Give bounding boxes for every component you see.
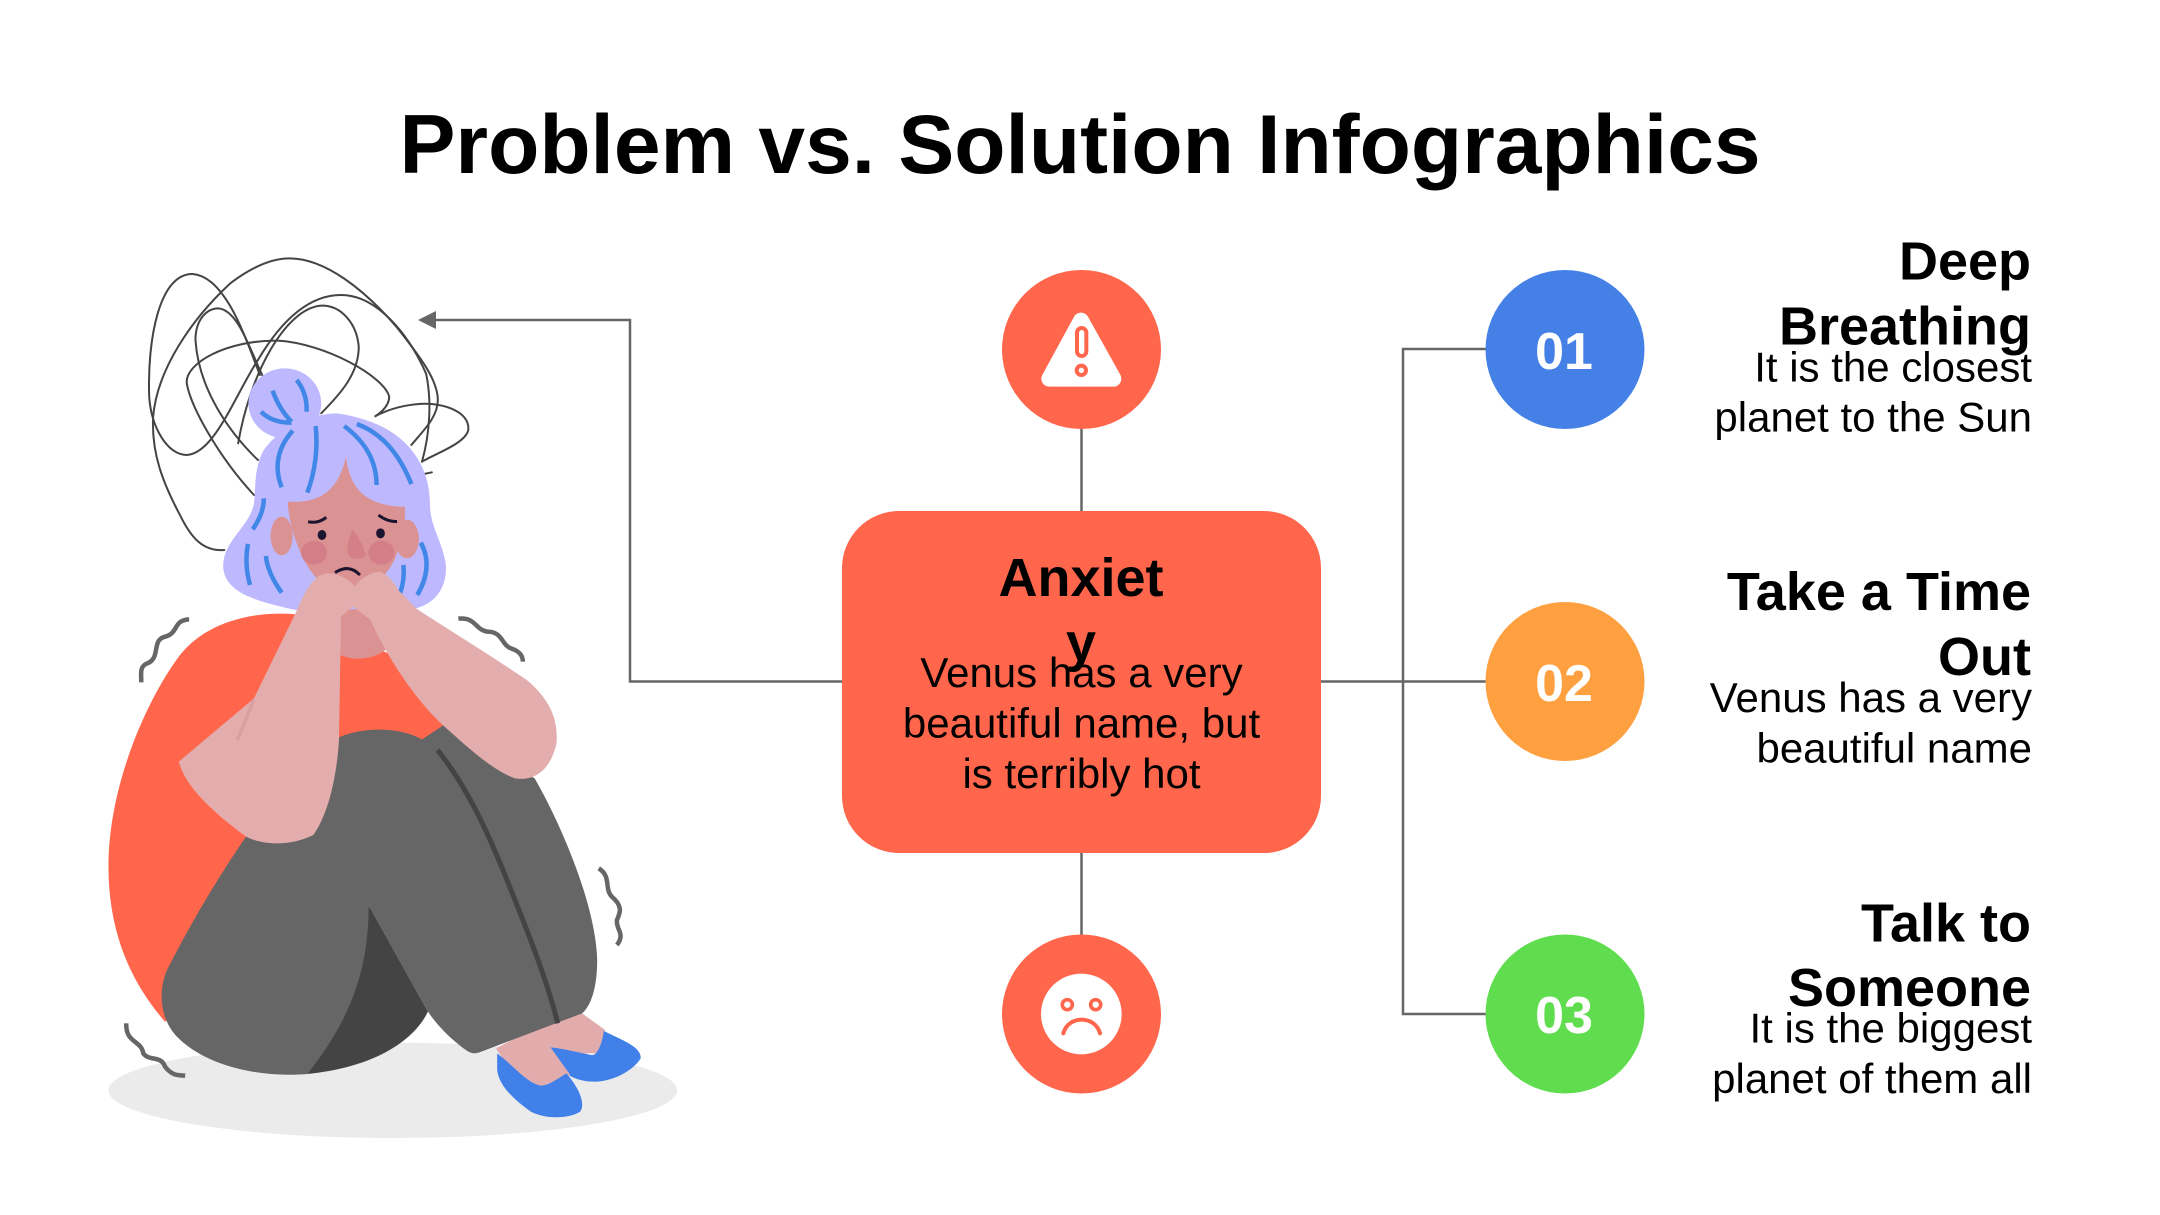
icon: sad face	[1002, 934, 1161, 1094]
solution 03	[1486, 894, 2032, 1102]
solution 03 description: planet of them all	[1712, 1055, 2032, 1102]
hair	[223, 413, 446, 610]
badge 02	[1486, 602, 1644, 761]
back leg skin	[531, 1013, 605, 1053]
solution 01	[1486, 232, 2032, 440]
connector lines	[434, 320, 1486, 1014]
solution 03 heading: Talk to	[1861, 894, 2031, 954]
problem description: Venus has a very	[920, 649, 1243, 696]
solution 02 heading: Take a Time	[1727, 562, 2031, 622]
ground shadow	[108, 1043, 677, 1138]
solution 01 heading: Deep	[1899, 232, 2031, 292]
problem box	[842, 511, 1321, 853]
front shoe	[497, 1053, 582, 1117]
badge 01: 01	[1535, 323, 1593, 381]
shake marks	[126, 618, 621, 1076]
face	[271, 457, 419, 588]
legs and feet	[162, 725, 641, 1117]
orange top and back	[108, 614, 456, 1022]
back shoe	[551, 1031, 641, 1082]
title: Problem vs. Solution Infographics	[399, 97, 1761, 191]
solution 02 heading: Out	[1938, 627, 2031, 687]
neck	[340, 607, 388, 659]
problem description: beautiful name, but	[903, 700, 1260, 746]
illustration: anxious woman	[108, 258, 677, 1138]
front leg skin	[496, 1025, 570, 1087]
badge 01	[1486, 270, 1644, 429]
badge 02: 02	[1535, 655, 1593, 713]
badge 03: 03	[1535, 987, 1593, 1045]
problem heading: Anxiet	[998, 548, 1164, 608]
icon: warning	[1002, 270, 1161, 429]
problem heading: y	[1066, 613, 1096, 673]
solution 02 description: beautiful name	[1756, 724, 2032, 772]
solution 03 description: It is the biggest	[1750, 1004, 2032, 1052]
arrow: to thought scribble	[418, 311, 436, 329]
scribble above head	[149, 258, 468, 550]
pants	[162, 725, 597, 1075]
hair strands	[246, 380, 427, 595]
solution 01 heading: Breathing	[1779, 296, 2031, 356]
hair bun	[248, 368, 321, 438]
solution 01 description: planet to the Sun	[1714, 394, 2032, 440]
solution 01 description: It is the closest	[1754, 344, 2032, 390]
problem description: is terribly hot	[962, 750, 1201, 797]
solution 02	[1486, 562, 2032, 772]
arms and hands	[179, 572, 557, 843]
solution 03 heading: Someone	[1788, 958, 2031, 1018]
pants inner dark	[307, 905, 428, 1074]
solution 02 description: Venus has a very	[1710, 674, 2032, 721]
pants crease	[437, 750, 558, 1023]
badge 03	[1486, 934, 1644, 1094]
